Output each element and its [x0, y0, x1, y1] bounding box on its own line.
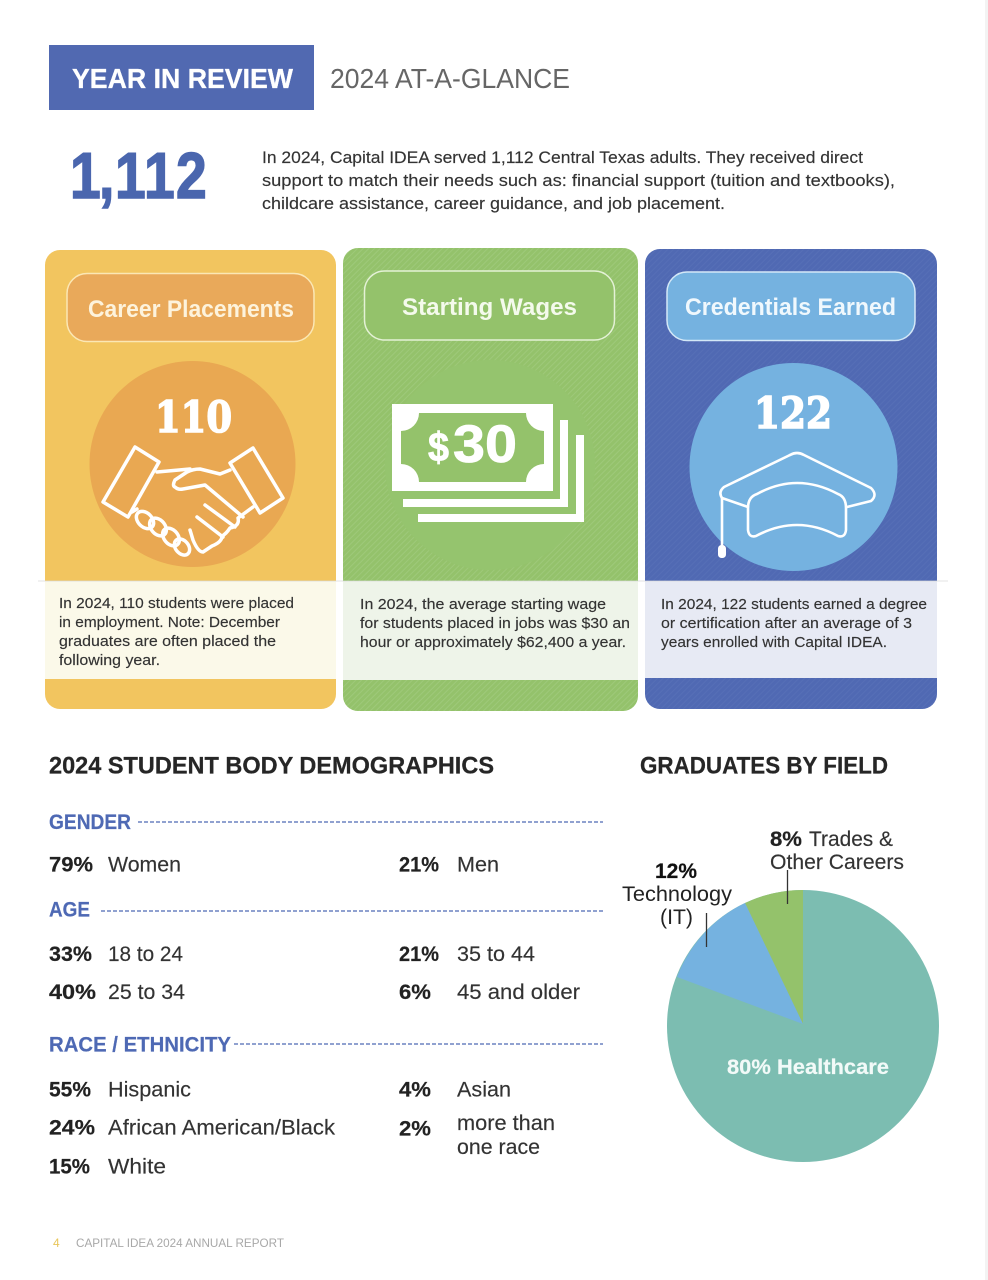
section: race and ethnicity: 55%: [49, 1078, 91, 1102]
pie chart: graduates by field: [667, 890, 939, 1162]
section: race and ethnicity: Hispanic: [108, 1078, 191, 1102]
intro text block: In 2024, Capital IDEA served 1,112 Central Texas adults. They received direct: [262, 148, 863, 167]
section: age: AGE: [49, 898, 90, 922]
panel: starting wages: [343, 248, 638, 711]
big number: adults served: 1,112: [70, 139, 207, 212]
slice: healthcare 80%: [667, 890, 939, 1162]
panel heading: career placements: Career Placements: [88, 296, 294, 323]
caption band: career placements: graduates are often placed the: [59, 633, 276, 650]
section: age: 35 to 44: [457, 943, 535, 966]
section: age: 6%: [399, 981, 431, 1004]
caption band: starting wages: [343, 581, 638, 680]
caption band: credentials earned: years enrolled with Capital IDEA.: [661, 634, 887, 651]
caption band: starting wages: hour or approximately $62,400 a year.: [360, 634, 626, 651]
panel: career placements: [45, 250, 336, 709]
section: age: [49, 898, 603, 1004]
panel: credentials earned: [645, 249, 937, 709]
header banner: year in review: [49, 45, 314, 110]
label: 12% technology: [622, 860, 733, 947]
intro text block: childcare assistance, career guidance, and job placement.: [262, 194, 725, 213]
label: 8% trades and other careers: Other Careers: [770, 851, 904, 874]
caption band: credentials earned: or certification after an average of 3: [661, 615, 912, 632]
panel heading: starting wages: [364, 271, 614, 340]
section: gender: Women: [108, 854, 181, 876]
caption band: career placements: In 2024, 110 students were placed: [59, 595, 294, 612]
heading: graduates by field: GRADUATES BY FIELD: [640, 752, 888, 780]
icon: graduation cap: [718, 453, 874, 558]
header banner: year in review: YEAR IN REVIEW: [72, 63, 294, 94]
icon circle: light blue: [690, 363, 898, 571]
label: 8% trades and other careers: 8%: [770, 828, 802, 851]
section: gender: Men: [457, 854, 499, 876]
section: race and ethnicity: [49, 1034, 603, 1178]
panel heading: credentials earned: [667, 272, 915, 340]
header subtitle: 2024 AT-A-GLANCE: [330, 63, 570, 94]
section: age: 25 to 34: [108, 981, 185, 1004]
icon: handshake: [103, 447, 283, 558]
icon: stack of money: [392, 404, 584, 522]
number: 122 credentials: 122: [754, 389, 832, 439]
section: gender: 79%: [49, 854, 93, 876]
icon circle: orange: [90, 361, 296, 567]
section: race and ethnicity: 15%: [49, 1156, 90, 1178]
caption band: starting wages: In 2024, the average starting wage: [360, 596, 606, 613]
footer: 4: [53, 1236, 60, 1250]
footer: CAPITAL IDEA 2024 ANNUAL REPORT: [76, 1236, 285, 1250]
section: gender: [49, 811, 603, 876]
section: race and ethnicity: White: [108, 1156, 166, 1178]
number: $30 wage: 30: [453, 415, 517, 474]
section: race and ethnicity: one race: [457, 1136, 540, 1159]
label: 8% trades and other careers: [770, 828, 904, 904]
caption band: credentials earned: [645, 581, 937, 678]
section: gender: 21%: [399, 854, 439, 876]
intro text block: support to match their needs such as: financial support (tuition and textbooks),: [262, 171, 895, 190]
caption band: credentials earned: In 2024, 122 students earned a degree: [661, 596, 927, 613]
section: age: 18 to 24: [108, 943, 183, 966]
number: 110 placements: 110: [155, 393, 232, 443]
number: $30 wage: $: [428, 424, 449, 470]
label: 80% healthcare: 80% Healthcare: [727, 1056, 889, 1079]
section: race and ethnicity: African American/Black: [108, 1116, 336, 1140]
section: race and ethnicity: Asian: [457, 1078, 511, 1102]
section: age: 21%: [399, 943, 439, 966]
label: 12% technology: Technology: [622, 883, 733, 906]
intro text block: [262, 148, 895, 213]
slice: technology 12%: [677, 903, 803, 1024]
section: age: 45 and older: [457, 981, 580, 1004]
slice: trades 8%: [745, 890, 803, 1024]
section: race and ethnicity: RACE / ETHNICITY: [49, 1034, 231, 1056]
panel heading: starting wages: Starting Wages: [402, 294, 577, 321]
caption band: career placements: in employment. Note: December: [59, 614, 280, 631]
icon circle: green: [385, 360, 595, 570]
panel heading: career placements: [67, 274, 314, 342]
section: age: 40%: [49, 981, 96, 1004]
caption band: career placements: following year.: [59, 652, 160, 669]
label: 12% technology: (IT): [660, 906, 693, 929]
section: race and ethnicity: more than: [457, 1112, 555, 1135]
number: $30 wage: [428, 415, 517, 474]
section: race and ethnicity: 24%: [49, 1116, 95, 1140]
caption band: career placements: [45, 581, 336, 679]
section: gender: GENDER: [49, 811, 131, 834]
label: 12% technology: 12%: [655, 860, 697, 883]
heading: student body demographics: 2024 STUDENT BODY DEMOGRAPHICS: [49, 752, 494, 780]
caption band: starting wages: for students placed in jobs was $30 an: [360, 615, 630, 632]
panel heading: credentials earned: Credentials Earned: [685, 294, 896, 321]
label: 8% trades and other careers: Trades &: [809, 828, 893, 851]
section: race and ethnicity: 4%: [399, 1078, 431, 1102]
section: race and ethnicity: 2%: [399, 1118, 431, 1140]
section: age: 33%: [49, 943, 92, 966]
